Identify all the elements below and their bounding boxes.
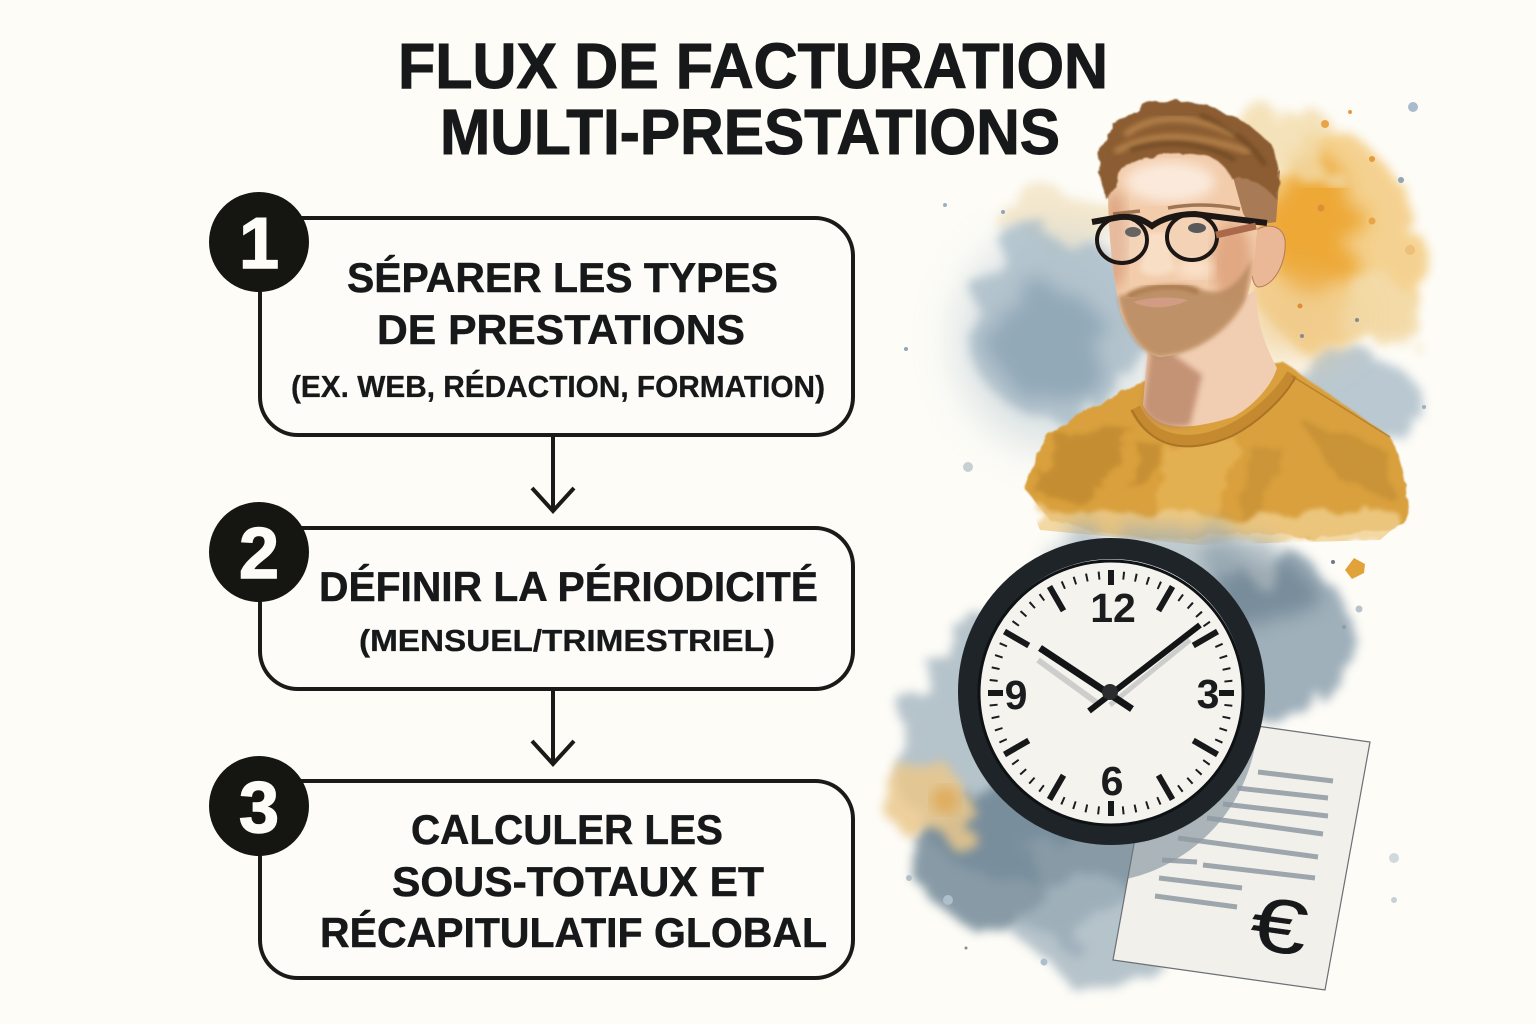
- eyes: [1125, 223, 1206, 237]
- badge 2: 2: [239, 514, 279, 594]
- glasses: [1092, 214, 1267, 263]
- title: MULTI-PRESTATIONS: [440, 96, 1060, 168]
- minute ticks: [993, 575, 1229, 811]
- panel: step 2: [209, 502, 853, 689]
- step 3 text: CALCULER LES: [411, 806, 723, 853]
- invoice text lines: [1155, 772, 1333, 907]
- title: [398, 30, 1108, 168]
- badge 2: [209, 502, 309, 602]
- badge 3: [209, 756, 309, 856]
- arrow: step 1 to step 2: [532, 435, 574, 511]
- nose: [1140, 232, 1176, 276]
- neck shadow: [1143, 352, 1202, 427]
- mouth: [1133, 298, 1188, 307]
- clock numerals: 9: [1005, 672, 1027, 718]
- clock numerals: [1005, 585, 1219, 804]
- step 2 text: [319, 563, 818, 658]
- title: FLUX DE FACTURATION: [398, 30, 1108, 102]
- badge 1: [209, 192, 309, 292]
- step 1 text: SÉPARER LES TYPES: [347, 254, 778, 301]
- hair: [1098, 100, 1280, 226]
- panel: step 1: [209, 192, 853, 435]
- step 3 text: RÉCAPITULATIF GLOBAL: [320, 909, 827, 956]
- t-shirt: [1023, 362, 1407, 545]
- clock numerals: 12: [1090, 585, 1136, 631]
- infographic canvas: [209, 42, 1436, 996]
- step 2 text: (MENSUEL/TRIMESTRIEL): [359, 623, 775, 658]
- invoice sheet: [1112, 726, 1371, 991]
- badge 3: 3: [239, 768, 279, 848]
- person portrait: [1023, 100, 1407, 545]
- clock numerals: 3: [1197, 671, 1219, 717]
- wall clock: [968, 548, 1254, 834]
- badge 1: 1: [239, 204, 279, 284]
- panel: step 3: [209, 756, 853, 978]
- watercolour washes behind clock: [883, 526, 1399, 973]
- neck: [1143, 290, 1277, 426]
- step 3 text: SOUS-TOTAUX ET: [392, 858, 764, 905]
- face: [1103, 145, 1262, 357]
- watercolour washes behind person: [904, 102, 1426, 472]
- clock rim: [968, 548, 1254, 834]
- arrow: step 2 to step 3: [532, 689, 574, 764]
- step 1 text: (EX. WEB, RÉDACTION, FORMATION): [291, 369, 825, 404]
- euro symbol: €: [1246, 881, 1313, 973]
- ear: [1251, 226, 1285, 287]
- beard: [1118, 258, 1252, 357]
- step 2 text: DÉFINIR LA PÉRIODICITÉ: [319, 563, 818, 610]
- step 1 text: DE PRESTATIONS: [377, 306, 745, 353]
- clock numerals: 6: [1101, 758, 1123, 804]
- step 1 text: [291, 254, 825, 404]
- eyebrows: [1113, 205, 1240, 214]
- hour ticks: [988, 570, 1234, 816]
- moustache and chin: [1128, 286, 1198, 296]
- hand shadows: [1038, 640, 1190, 705]
- collar band: [1135, 374, 1292, 440]
- clock hands: [1040, 625, 1200, 711]
- step 3 text: [320, 806, 827, 956]
